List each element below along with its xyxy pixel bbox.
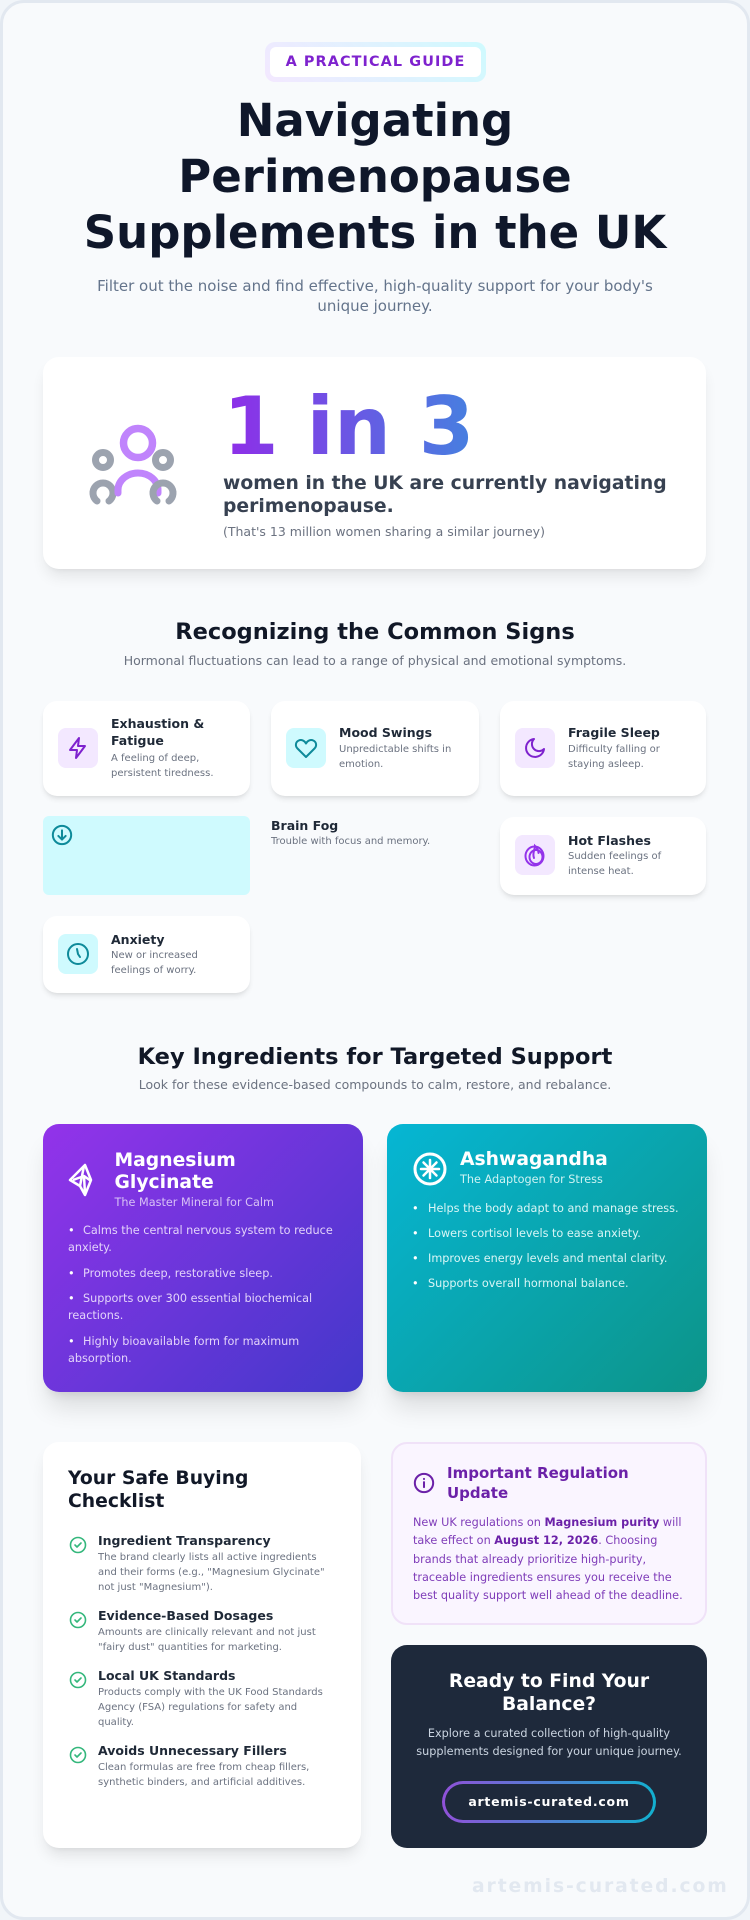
- regulation body: [413, 1516, 683, 1602]
- checklist item: avoids unnecessary fillers: synthetic binders, and artificial additives.: [98, 1776, 305, 1788]
- cta heading: [449, 1671, 650, 1714]
- card: anxiety: feelings of worry.: [111, 965, 196, 976]
- panel: regulation update: [391, 1442, 707, 1625]
- regulation heading: Update: [447, 1484, 508, 1502]
- icon: moon: [515, 728, 555, 768]
- checklist item: evidence-based dosages: [98, 1608, 316, 1652]
- ashwagandha bullet list: •: [412, 1227, 419, 1240]
- checklist item: local uk standards: quality.: [98, 1716, 134, 1728]
- subtitle: Filter out the noise and find effective, high-quality support for your body's: [97, 277, 653, 295]
- magnesium bullet list: Calms the central nervous system to reduce: [83, 1224, 333, 1237]
- regulation body: traceable ingredients ensures you receive the: [413, 1571, 672, 1584]
- text: Hot Flashes: [568, 832, 651, 848]
- card: exhaustion: A feeling of deep,: [111, 753, 199, 764]
- magnesium bullet list: Promotes deep, restorative sleep.: [83, 1266, 273, 1280]
- card: exhaustion: [43, 701, 250, 796]
- text: brain fog: [270, 818, 430, 847]
- magnesium bullet list: anxiety.: [68, 1241, 112, 1254]
- magnesium bullet list: •: [68, 1224, 75, 1237]
- ashwagandha bullet list: •: [412, 1202, 419, 1215]
- card: fragile sleep: Difficulty falling or: [568, 744, 660, 755]
- statistic number: 1 in 3: [223, 380, 474, 473]
- checklist heading: Checklist: [68, 1490, 164, 1512]
- checklist item: evidence-based dosages: Evidence-Based Dosages: [98, 1608, 273, 1623]
- icon: sun asterisk: [414, 1152, 446, 1186]
- ashwagandha bullet list: Helps the body adapt to and manage stress.: [428, 1202, 679, 1215]
- card: mood swings: Unpredictable shifts in: [339, 744, 451, 755]
- checklist item: ingredient transparency: Ingredient Transparency: [98, 1533, 271, 1548]
- icon: flame: [515, 835, 555, 875]
- cta button: artemis-curated.com: [468, 1794, 630, 1809]
- ashwagandha bullet list: •: [412, 1277, 419, 1290]
- heading: common signs: Recognizing the Common Signs: [175, 619, 575, 645]
- text: [111, 716, 204, 748]
- ashwagandha bullet list: •: [412, 1252, 419, 1265]
- cta text: Explore a curated collection of high-quality: [428, 1727, 670, 1740]
- statistic text: perimenopause.: [223, 496, 394, 516]
- cta text: supplements designed for your unique journey.: [416, 1744, 682, 1758]
- subtitle: unique journey.: [317, 297, 433, 315]
- magnesium bullet list: Highly bioavailable form for maximum: [83, 1334, 299, 1348]
- checklist item: ingredient transparency: not just "Magnesium").: [98, 1582, 213, 1592]
- magnesium bullet list: •: [68, 1292, 75, 1305]
- panel: magnesium glycinate: [43, 1124, 363, 1392]
- text: Exhaustion &: [111, 716, 204, 731]
- heading: key ingredients: Key Ingredients for Targeted Support: [138, 1044, 612, 1070]
- text: Anxiety: [111, 932, 165, 946]
- magnesium bullet list: •: [68, 1266, 75, 1280]
- panel: ashwagandha: [387, 1124, 707, 1392]
- text: brain fog: Brain Fog: [271, 818, 338, 833]
- text: Fragile Sleep: [568, 725, 660, 740]
- title: Perimenopause: [178, 150, 572, 203]
- card: hot flashes: intense heat.: [568, 866, 634, 877]
- text: brain fog: Trouble with focus and memory.: [271, 836, 430, 847]
- badge: a practical guide: [265, 42, 486, 82]
- magnesium bullet list: Supports over 300 essential biochemical: [83, 1292, 312, 1305]
- checklist item: avoids unnecessary fillers: [98, 1743, 309, 1788]
- title: [84, 94, 668, 259]
- cta button: [442, 1781, 656, 1823]
- regulation body: take effect on August 12, 2026. Choosing: [413, 1534, 657, 1547]
- checklist heading: Your Safe Buying: [68, 1468, 248, 1489]
- subtitle: [97, 277, 653, 315]
- checklist item: local uk standards: Agency (FSA) regulations for safety and: [98, 1702, 297, 1712]
- card: mood swings: emotion.: [339, 759, 383, 770]
- checklist item: avoids unnecessary fillers: Avoids Unnecessary Fillers: [98, 1743, 287, 1758]
- statistic text: women in the UK are currently navigating: [223, 472, 667, 494]
- regulation body: brands that already prioritize high-purity,: [413, 1553, 646, 1566]
- statistic text: [223, 472, 667, 516]
- checklist item: evidence-based dosages: Amounts are clinically relevant and not just: [98, 1626, 316, 1638]
- card: mood swings: [271, 701, 479, 796]
- icon: lightning: [58, 728, 98, 768]
- magnesium title: [114, 1150, 236, 1193]
- icon: down arrow circle: [52, 824, 72, 846]
- ashwagandha bullet list: Supports overall hormonal balance.: [428, 1277, 629, 1290]
- card: anxiety: [43, 916, 250, 993]
- checklist item: ingredient transparency: [98, 1533, 325, 1592]
- magnesium bullet list: [68, 1224, 333, 1365]
- title: Supplements in the UK: [84, 206, 666, 259]
- magnesium bullet list: absorption.: [68, 1352, 132, 1365]
- regulation heading: [447, 1464, 629, 1502]
- checklist heading: [68, 1468, 248, 1512]
- ashwagandha subtitle: The Adaptogen for Stress: [460, 1173, 603, 1186]
- checklist item: ingredient transparency: The brand clearly lists all active ingredients: [98, 1552, 317, 1562]
- subheading: key ingredients: Look for these evidence-based compounds to calm, restore, and rebalance.: [139, 1077, 611, 1092]
- panel: 1 in 3 statistic: [43, 357, 706, 569]
- magnesium bullet list: •: [68, 1334, 75, 1348]
- ashwagandha bullet list: [412, 1202, 679, 1290]
- title: Navigating: [237, 94, 513, 146]
- icon: info: [414, 1472, 434, 1494]
- panel: safe buying checklist: [43, 1442, 361, 1848]
- statistic note: (That's 13 million women sharing a similar journey): [223, 524, 545, 538]
- text: Fatigue: [111, 733, 164, 748]
- magnesium bullet list: reactions.: [68, 1309, 123, 1322]
- card: exhaustion: persistent tiredness.: [111, 768, 214, 779]
- icon: heart: [286, 728, 326, 768]
- card: anxiety: New or increased: [111, 950, 198, 961]
- text: Mood Swings: [339, 725, 432, 740]
- cta heading: Ready to Find Your: [449, 1671, 649, 1692]
- subheading: common signs: Hormonal fluctuations can lead to a range of physical and emotional symptoms.: [124, 652, 626, 668]
- badge: a practical guide: A PRACTICAL GUIDE: [286, 54, 465, 70]
- card: hot flashes: Sudden feelings of: [568, 851, 661, 862]
- icon: clock: [58, 934, 98, 974]
- panel: call to action: [391, 1645, 707, 1848]
- regulation body: New UK regulations on Magnesium purity will: [413, 1516, 681, 1529]
- ashwagandha bullet list: Improves energy levels and mental clarity.: [428, 1252, 667, 1265]
- card: hot flashes: [500, 817, 706, 895]
- cta heading: Balance?: [502, 1694, 596, 1714]
- ashwagandha title: Ashwagandha: [460, 1149, 608, 1170]
- regulation body: best quality support well ahead of the deadline.: [413, 1589, 683, 1602]
- checklist item: local uk standards: Local UK Standards: [98, 1668, 235, 1683]
- watermark: artemis-curated.com: [472, 1876, 729, 1897]
- checklist item: ingredient transparency: and their forms (e.g., "Magnesium Glycinate": [98, 1566, 325, 1578]
- regulation heading: Important Regulation: [447, 1464, 629, 1482]
- checklist item: avoids unnecessary fillers: Clean formulas are free from cheap fillers,: [98, 1762, 309, 1772]
- card: fragile sleep: staying asleep.: [568, 759, 644, 770]
- icon: crystal: [68, 1164, 92, 1196]
- magnesium title: Glycinate: [114, 1172, 214, 1193]
- card: brain fog cyan panel: [43, 816, 250, 895]
- checklist item: evidence-based dosages: "fairy dust" quantities for marketing.: [98, 1642, 282, 1652]
- magnesium subtitle: The Master Mineral for Calm: [114, 1196, 274, 1209]
- icon: group of women: [90, 424, 176, 504]
- checklist item: local uk standards: [98, 1668, 323, 1728]
- magnesium title: Magnesium: [114, 1150, 236, 1170]
- ashwagandha bullet list: Lowers cortisol levels to ease anxiety.: [428, 1227, 641, 1240]
- checklist item: local uk standards: Products comply with the UK Food Standards: [98, 1686, 323, 1698]
- card: fragile sleep: [500, 701, 706, 796]
- cta text: [416, 1727, 682, 1758]
